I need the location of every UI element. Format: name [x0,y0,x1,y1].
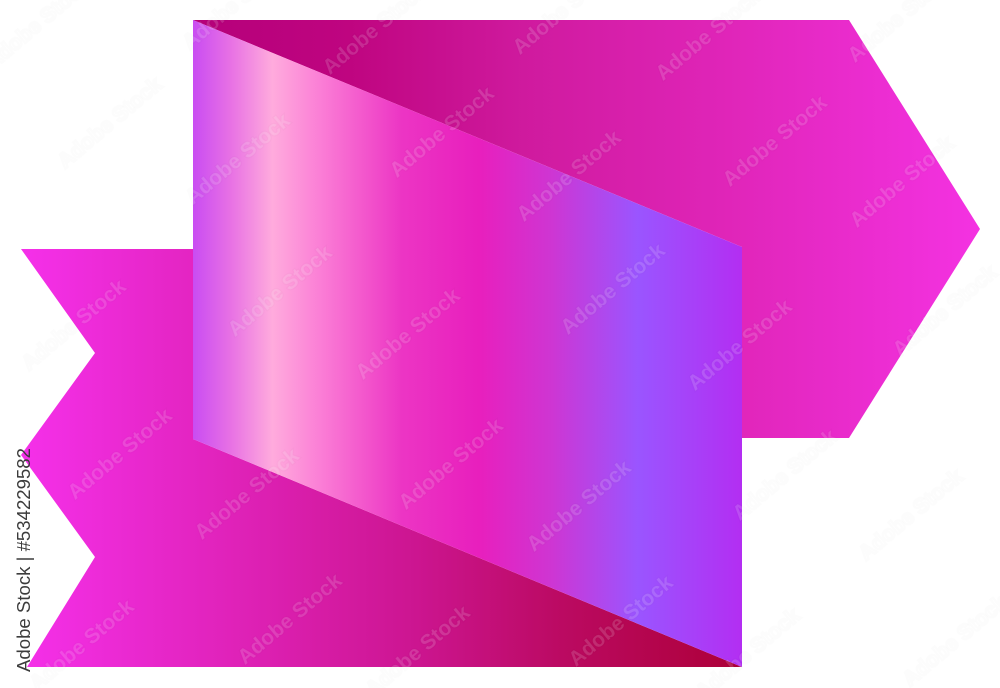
stock watermark pattern: Adobe Stock [556,239,670,339]
stock watermark pattern: Adobe Stock [53,73,167,173]
stock watermark pattern: Adobe Stock [181,109,295,209]
stock watermark pattern: Adobe Stock [385,82,499,182]
top ribbon band with arrow end [193,20,980,438]
stock watermark pattern: Adobe Stock [351,284,465,384]
stock watermark pattern: Adobe Stock [394,414,508,514]
stock watermark pattern: Adobe Stock [522,456,636,556]
stock watermark pattern: Adobe Stock [728,425,842,525]
stock watermark pattern: Adobe Stock [63,404,177,504]
stock watermark pattern: Adobe Stock [512,126,626,226]
stock watermark pattern: Adobe Stock [718,91,832,191]
stock watermark pattern: Adobe Stock [190,444,304,544]
central folded panel [193,20,742,667]
stock watermark pattern: Adobe Stock [845,132,959,232]
stock watermark pattern: Adobe Stock [223,241,337,341]
stock watermark pattern: Adobe Stock [888,261,1000,361]
stock watermark pattern: Adobe Stock [564,571,678,671]
stock id label: Adobe Stock | #534229582 [14,448,34,672]
bottom ribbon band with notched tail [21,249,742,667]
stock watermark pattern: Adobe Stock [854,465,968,565]
stock watermark pattern: Adobe Stock [17,275,131,375]
stock watermark pattern: Adobe Stock [233,569,347,669]
stock watermark pattern: Adobe Stock [683,295,797,395]
